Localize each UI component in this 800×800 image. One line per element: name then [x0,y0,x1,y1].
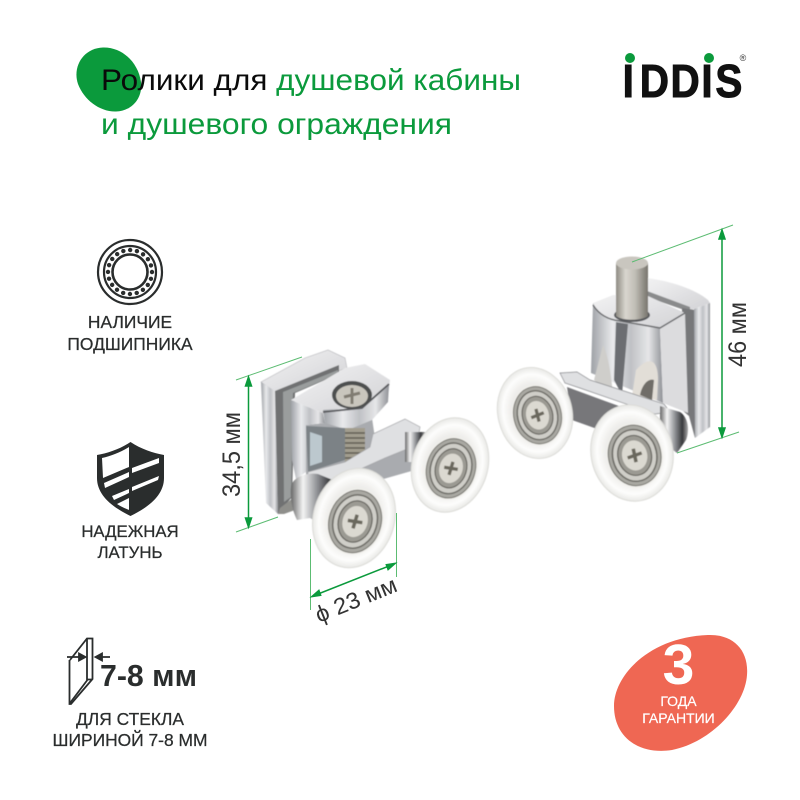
label: brass: НАДЕЖНАЯ [81,522,179,541]
rear wheel [400,408,500,522]
product photo: left roller [261,350,500,578]
warranty label: ГАРАНТИИ [642,710,715,726]
clamp body [291,364,390,479]
icon: glass pane [67,638,110,704]
pin [614,256,650,322]
IDDIS logo [623,53,747,108]
logo wordmark: IDDIS [623,57,742,108]
title block [76,47,521,141]
green blob behind title [76,47,141,112]
arrow [246,377,252,527]
extension lines [310,513,396,610]
product photo: right roller [488,256,710,509]
rear axle [405,432,425,462]
arrow [719,230,725,437]
warranty badge [614,633,747,751]
front wheel [582,397,682,509]
icon: bearing [98,240,162,304]
rear axle [567,387,630,430]
arm [560,372,670,414]
arrow [313,564,394,596]
dimension: 46 mm [632,225,752,453]
back plate [261,350,347,514]
title line 2: и душевого ограждения [101,108,452,141]
warranty number: 3 [663,633,694,697]
value: 34,5 мм [218,412,246,497]
front wheel [300,458,408,578]
extension lines [236,357,302,532]
dimension: 34,5 mm [218,357,302,532]
logo dot 1 [625,53,635,63]
front axle [660,406,688,453]
clamp body [591,295,688,413]
rear shadow fill [306,418,420,490]
badge blob [614,635,747,751]
registered mark: ® [740,53,747,63]
label: glass width: ДЛЯ СТЕКЛА [76,709,184,729]
glass width value: 7-8 мм [100,658,197,693]
threaded bolt [345,428,365,464]
arrow heads [311,563,396,597]
extension lines [632,225,739,453]
warranty label: ГОДА [660,693,697,709]
rear wheel [488,359,582,467]
thread lines [345,433,365,458]
feature: brass [81,442,179,562]
title line 1: Ролики для душевой кабины [101,64,521,97]
icon: shield [97,442,164,516]
bolt hole [332,381,372,409]
front axle [291,474,340,530]
back plate [647,278,710,438]
value: 46 мм [724,302,752,367]
logo dot 2 [704,53,714,63]
label: bearing: ПОДШИПНИКА [67,334,193,354]
label: brass: ЛАТУНЬ [98,543,162,562]
value: ϕ 23 мм [311,571,401,628]
dimension: diameter 23 mm [310,513,401,628]
feature: glass width [53,638,207,750]
label: bearing: НАЛИЧИЕ [88,312,172,332]
arm [308,419,420,485]
label: glass width: ШИРИНОЙ 7-8 ММ [53,730,207,750]
feature: bearing [67,240,193,354]
